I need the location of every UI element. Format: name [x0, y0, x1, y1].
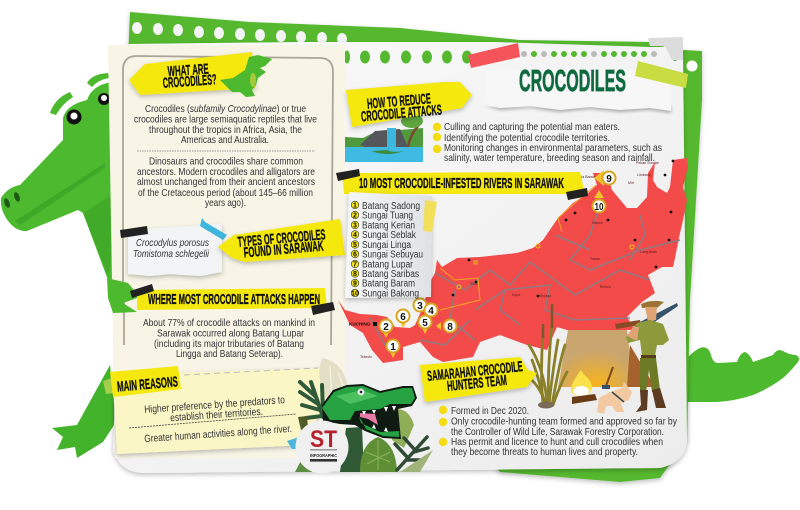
map pins: 1	[390, 342, 396, 353]
card: river list: Sungai Linga	[362, 240, 411, 251]
card: river list: 4	[353, 232, 357, 239]
note: main reasons	[113, 368, 338, 454]
heading: types of crocodiles	[218, 219, 345, 262]
card: river list: 5	[353, 242, 357, 249]
list: how to reduce attacks: salinity, water temperature, breeding season and rainfall.	[444, 153, 655, 164]
binder holes in green sheet	[132, 22, 698, 72]
folded paper corner	[648, 37, 683, 60]
card: river list: Sungai Bakong	[362, 288, 419, 300]
map of Sarawak: Bintulu	[600, 285, 611, 289]
card: river list: Batang Baram	[362, 278, 415, 290]
note: main reasons: Higher preference by the predators to	[144, 395, 285, 416]
text block: where attacks happen: About 77% of crocodile attacks on mankind in	[143, 318, 315, 329]
map pins: 9	[606, 174, 612, 185]
heading: types of crocodiles: FOUND IN SARAWAK	[243, 239, 324, 261]
text block: where attacks happen	[143, 318, 315, 360]
list: hunters team facts: Formed in Dec 2020.	[451, 406, 529, 417]
card: river list: Batang Kerian	[362, 220, 415, 232]
map of Sarawak: Kapit	[512, 293, 520, 297]
card: river list: Sungai Tuang	[362, 210, 413, 222]
card: river list: 1	[353, 202, 357, 210]
card: crocodile species: Crocodylus porosus	[136, 238, 209, 249]
text block: where attacks happen: Lingga and Batang Seterap).	[176, 349, 283, 360]
note: main reasons: establish their territories.	[170, 407, 263, 424]
map of Sarawak: Pekan Sundar	[636, 161, 660, 165]
text block: crocodile definition: of the Cretaceous period (about 145–66 million	[138, 188, 313, 199]
main white paper	[113, 42, 687, 473]
map of Sarawak: Limbang	[637, 173, 651, 177]
map pins: 3	[417, 301, 423, 312]
heading: where most attacks happen: WHERE MOST CROCODILE ATTACKS HAPPEN	[148, 292, 320, 308]
map of Sarawak: KUCHING	[349, 322, 371, 326]
card: river list: Batang Saribas	[362, 269, 419, 280]
map pins: 2	[383, 322, 389, 333]
heading: samarahan hunters team: SAMARAHAN CROCODILE	[426, 359, 524, 385]
map pins	[380, 170, 616, 358]
list: how to reduce attacks: Monitoring changes in environmental parameters, such as	[444, 143, 662, 154]
logo: ST infographic: ST	[310, 426, 337, 453]
card: river list: Batang Sadong	[362, 201, 420, 212]
map pins: 8	[447, 322, 453, 333]
map of Sarawak: Sibu	[470, 282, 477, 286]
heading: 10 most infested rivers	[336, 169, 588, 200]
card: river list: 8	[353, 271, 357, 278]
text block: crocodile definition: almost unchanged from their ancient ancestors	[137, 177, 315, 188]
text block: crocodile definition	[134, 104, 317, 209]
list: hunters team facts: the Controller of Wild Life, Sarawak Forestry Corporation.	[451, 427, 664, 438]
tape: red	[468, 43, 520, 68]
card: river list: 9	[353, 280, 357, 288]
crocodile tail	[687, 347, 799, 402]
heading: where most attacks happen	[130, 284, 335, 315]
heading: how to reduce crocodile attacks	[346, 82, 472, 127]
logo: ST infographic: INFOGRAPHIC	[310, 453, 338, 458]
card: river list: 3	[353, 222, 357, 230]
map pins: 6	[400, 312, 406, 323]
title: crocodiles: CROCODILES	[519, 63, 626, 98]
map of Sarawak: Miri	[628, 181, 634, 185]
heading: how to reduce crocodile attacks: CROCODILE ATTACKS	[360, 102, 443, 125]
text block: crocodile definition: Crocodiles (subfamily Crocodylinae) or true	[145, 104, 306, 115]
text block: crocodile definition: crocodiles are large semiaquatic reptiles that live	[134, 114, 317, 126]
text block: where attacks happen: (including its major tributaries of Batang	[154, 339, 304, 350]
heading: how to reduce crocodile attacks: HOW TO REDUCE	[366, 91, 432, 113]
text block: crocodile definition: throughout the tropics in Africa, Asia, the	[149, 125, 302, 136]
list: how to reduce attacks: Culling and capturing the potential man eaters.	[444, 122, 620, 133]
title: crocodiles	[485, 63, 672, 113]
heading: 10 most infested rivers: 10 MOST CROCODILE-INFESTED RIVERS IN SARAWAK	[359, 176, 564, 192]
map of Sarawak: Marudi	[592, 221, 603, 225]
list: hunters team facts: they become threats to human lives and property.	[451, 447, 638, 458]
text block: where attacks happen: Sarawak occurred along Batang Lupar	[157, 328, 304, 340]
illustration: hunter	[615, 301, 678, 412]
text block: crocodile definition: ancestors. Modern crocodiles and alligators are	[137, 167, 315, 178]
list: how to reduce attacks: Identifying the potential crocodile territories.	[444, 133, 610, 144]
map of Sarawak: Kuala Baram	[575, 175, 596, 179]
heading: samarahan hunters team: HUNTERS TEAM	[446, 373, 508, 395]
heading: samarahan hunters team	[420, 357, 537, 402]
illustration: river with waterfall	[345, 114, 423, 162]
heading: what are crocodiles	[129, 52, 256, 95]
illustration: hunter camp	[558, 330, 655, 414]
map of Sarawak: Tebedu	[360, 355, 372, 359]
crocodile head	[1, 73, 125, 280]
card: river list: Sungai Seblak	[362, 230, 417, 241]
card: river list: Batang Lupar	[362, 260, 414, 270]
map of Sarawak	[338, 158, 688, 363]
tape: lime	[635, 61, 688, 88]
list: hunters team facts: Only crocodile-hunting team formed and approved so far by	[451, 416, 678, 428]
card: river list: Sungai Sebuyau	[362, 250, 423, 260]
jungle foliage	[295, 358, 433, 472]
card: river list: 6	[353, 252, 357, 258]
note: main reasons: Greater human activities along the river.	[144, 424, 292, 445]
card: river list	[345, 192, 437, 300]
heading: what are crocodiles: WHAT ARE	[167, 62, 209, 80]
card: crocodile species	[120, 218, 227, 276]
heading: main reasons: MAIN REASONS	[116, 374, 179, 396]
map of Sarawak: Long Akah	[640, 250, 657, 254]
crocodile back leg	[52, 365, 116, 458]
map pins: 10	[594, 202, 604, 213]
list: hunters team facts: Has permit and licence to hunt and cull crocodiles when	[451, 437, 663, 448]
crocodile front foot	[107, 278, 140, 313]
map pins: 4	[428, 306, 434, 317]
logo: ST infographic	[287, 420, 348, 474]
map of Sarawak: Tubau	[590, 257, 600, 261]
back green sheet	[128, 12, 702, 482]
heading: types of crocodiles: TYPES OF CROCODILES	[237, 227, 326, 251]
heading: main reasons	[103, 366, 181, 397]
heading: what are crocodiles: CROCODILES?	[162, 72, 217, 92]
card: crocodile species: Tomistoma schlegelii	[133, 249, 210, 260]
list: how to reduce attacks	[433, 122, 662, 164]
card: river list: 10	[351, 290, 359, 298]
spiral holes on white paper	[344, 47, 679, 64]
illustration: crocodile head	[322, 384, 417, 439]
card: river list: 2	[353, 212, 357, 220]
text block: crocodile definition: years ago).	[205, 198, 246, 209]
list: hunters team facts	[439, 406, 678, 458]
map pins: 5	[422, 318, 428, 329]
icon: cartoon crocodile	[220, 55, 272, 97]
map of Sarawak: Belaga	[540, 294, 551, 298]
panel: cream left column	[108, 45, 345, 458]
card: river list: 7	[353, 262, 357, 268]
text block: crocodile definition: Americas and Australia.	[181, 135, 269, 146]
illustration: reeds	[526, 305, 567, 408]
text block: crocodile definition: Dinosaurs and crocodiles share common	[149, 156, 303, 168]
